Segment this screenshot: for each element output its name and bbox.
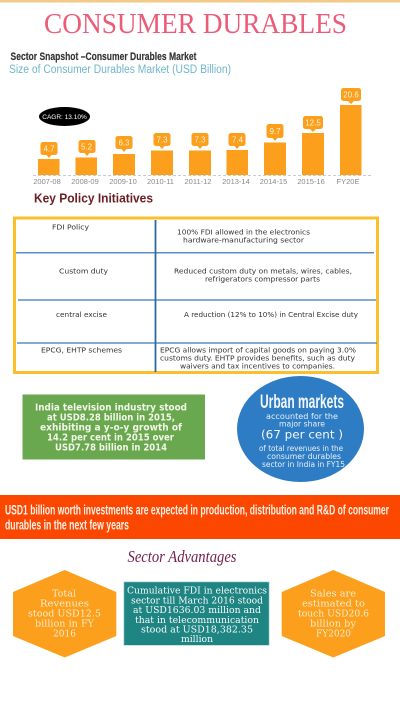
row: EPCG, EHTP schemes (41, 346, 356, 370)
row: central excise (56, 310, 359, 319)
row: EPCG, EHTP schemes: waivers and tax incentives to companies. (180, 361, 335, 370)
bar chart: FY20E (337, 177, 359, 186)
bar chart: 7.4 (232, 136, 244, 144)
hexagon: sales estimate: billion by (310, 619, 357, 630)
callout: urban markets: consumer durables (267, 452, 341, 461)
bar chart: 2010-11 (147, 177, 174, 186)
callout: urban markets: major share (279, 420, 325, 428)
hexagon: total revenues: billion in FY (35, 619, 95, 630)
row: custom duty (59, 267, 352, 283)
bar chart: 20.6 (343, 90, 359, 100)
callout: television industry (22, 394, 205, 460)
callout: television industry: exhibiting a y-o-y growth of (40, 422, 183, 433)
callout: urban markets: of total revenues in the (259, 444, 343, 453)
hexagon: total revenues: Total (52, 589, 76, 600)
row: central excise: central excise (56, 310, 108, 319)
hexagon: total revenues: stood USD12.5 (28, 609, 101, 620)
row: FDI policy: FDI Policy (52, 223, 90, 232)
hexagon: sales estimate: estimated to (302, 599, 365, 610)
box: cumulative FDI: at USD1636.03 million and (133, 606, 261, 616)
callout: urban markets: accounted for the (266, 412, 338, 421)
row: central excise: A reduction (12% to 10%) in Central Excise duty (184, 310, 359, 319)
hexagon: sales estimate: FY2020 (316, 629, 351, 640)
callout: television industry: USD7.78 billion in 2014 (55, 442, 167, 454)
row: EPCG, EHTP schemes: EPCG allows import of capital goods on paying 3.0% (160, 346, 356, 355)
row: FDI policy: 100% FDI allowed in the electronics (177, 228, 310, 237)
row: EPCG, EHTP schemes: customs duty. EHTP provides benefits, such as duty (160, 354, 356, 363)
heading: sector snapshot: Sector Snapshot –Consumer Durables Market (10, 51, 197, 63)
bar chart: 2007-08 (33, 177, 61, 186)
callout: television industry: at USD8.28 billion in 2015, (47, 412, 175, 423)
bar chart: 2013-14 (222, 177, 250, 186)
policy table (14, 218, 378, 372)
row: custom duty: Custom duty (59, 267, 109, 276)
callout: urban markets: Urban markets (260, 392, 344, 413)
bar chart (33, 88, 371, 186)
row: EPCG, EHTP schemes: EPCG, EHTP schemes (41, 346, 122, 355)
bar chart: 6.3 (118, 138, 130, 148)
hexagon: sales estimate: Sales are (310, 589, 356, 600)
hexagon: total revenues: Revenues (40, 599, 89, 610)
callout: urban markets: sector in India in FY15 (262, 460, 345, 469)
heading: key policy initiatives: Key Policy Initiatives (34, 190, 153, 206)
hexagon: total revenues (13, 570, 116, 658)
CAGR badge: CAGR: 13.10% (42, 114, 87, 121)
callout: television industry: 14.2 per cent in 2015 over (47, 432, 174, 443)
hexagon: sales estimate (282, 570, 385, 658)
box: cumulative FDI: stood at USD18,382.35 (141, 626, 253, 636)
bar chart: 7.3 (194, 136, 206, 144)
box: cumulative FDI: sector till March 2016 stood (131, 596, 263, 606)
callout: television industry: India television industry stood (35, 402, 187, 413)
bar chart: 2011-12 (185, 177, 211, 186)
box: cumulative FDI: that in telecommunication (135, 616, 259, 626)
bar chart: 7.3 (156, 136, 168, 144)
row: custom duty: refrigerators compressor parts (205, 274, 320, 283)
bar chart: 2014-15 (260, 177, 287, 186)
banner: investments: durables in the next few years (5, 518, 129, 532)
chart subtitle: Size of Consumer Durables Market (USD Billion) (9, 64, 231, 76)
callout: urban markets (237, 376, 364, 482)
row: FDI policy: hardware-manufacturing sector (183, 235, 304, 244)
hexagon: total revenues: 2016 (53, 629, 76, 640)
bar chart: 5.2 (81, 142, 93, 152)
box: cumulative FDI (124, 582, 269, 645)
title: CONSUMER DURABLES (44, 9, 347, 40)
row: FDI policy (52, 223, 310, 244)
bar chart: 4.7 (43, 144, 55, 154)
callout: urban markets: (67 per cent ) (261, 428, 343, 442)
bar chart: 12.5 (305, 118, 321, 128)
row: custom duty: Reduced custom duty on metals, wires, cables, (174, 267, 352, 276)
box: cumulative FDI: Cumulative FDI in electronics (127, 587, 267, 597)
hexagon: sales estimate: touch USD20.6 (298, 609, 369, 620)
bar chart: 2008-09 (71, 177, 99, 186)
CAGR badge (39, 107, 90, 126)
box: cumulative FDI: million (181, 635, 213, 645)
bar chart: 9.7 (269, 127, 281, 136)
bar chart: 2009-10 (109, 177, 137, 186)
bar chart: 2015-16 (297, 177, 325, 186)
heading: sector advantages: Sector Advantages (128, 547, 237, 566)
banner: investments (0, 495, 400, 539)
